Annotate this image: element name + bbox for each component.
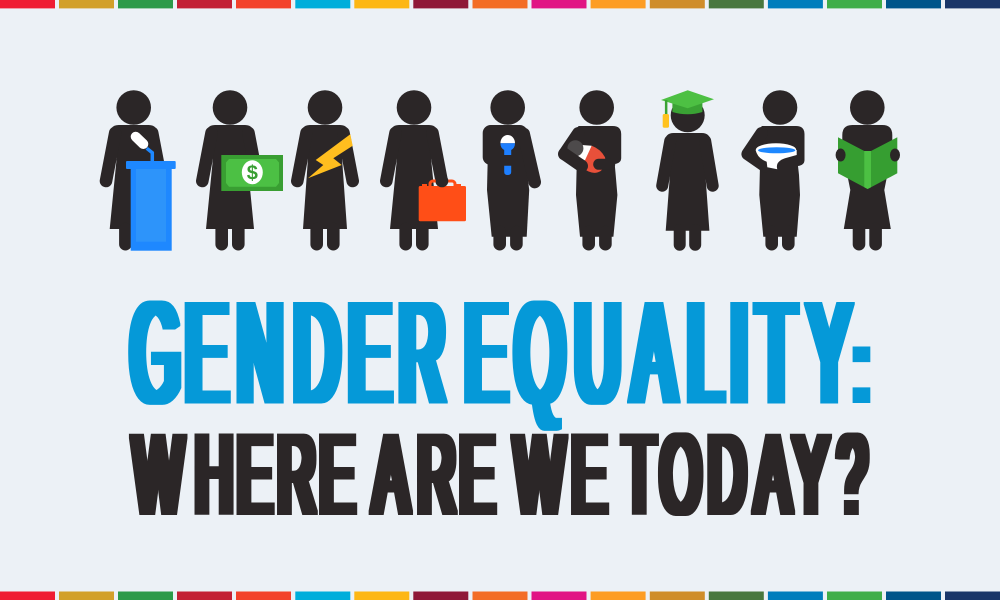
figure: woman with banknote bbox=[202, 90, 283, 244]
figure: woman carrying water bowl bbox=[748, 90, 804, 244]
figure: politician at podium bbox=[106, 90, 176, 251]
figure: woman with lightning bolt bbox=[297, 90, 353, 244]
figure: woman reading book bbox=[836, 90, 900, 244]
icon: lightning bolt bbox=[308, 134, 353, 178]
bottom colour strip bbox=[0, 592, 1000, 600]
icon: banknote: $ bbox=[247, 162, 258, 184]
figure: graduate bbox=[661, 90, 714, 245]
subheading: where are we today: WHERE ARE WE TODAY? bbox=[134, 412, 867, 537]
heading: gender equality: GENDER EQUALITY bbox=[131, 272, 850, 434]
icon: open book bbox=[838, 137, 897, 189]
icon: graduation cap bbox=[661, 90, 714, 128]
figure: woman with briefcase bbox=[386, 90, 466, 244]
hands on book bbox=[836, 148, 900, 162]
icon: podium bbox=[126, 137, 176, 251]
figure: woman with light bulb bbox=[483, 90, 535, 244]
icon: water bowl bbox=[756, 143, 797, 169]
icon: bulb bbox=[500, 135, 515, 175]
icon: baby bbox=[567, 140, 610, 173]
top colour strip bbox=[0, 0, 1000, 8]
hand gripping handle bbox=[436, 175, 448, 187]
icon: banknote bbox=[221, 155, 283, 191]
icon: briefcase bbox=[419, 181, 466, 221]
figure: woman holding baby bbox=[564, 90, 621, 244]
heading: gender equality: : bbox=[853, 314, 870, 420]
